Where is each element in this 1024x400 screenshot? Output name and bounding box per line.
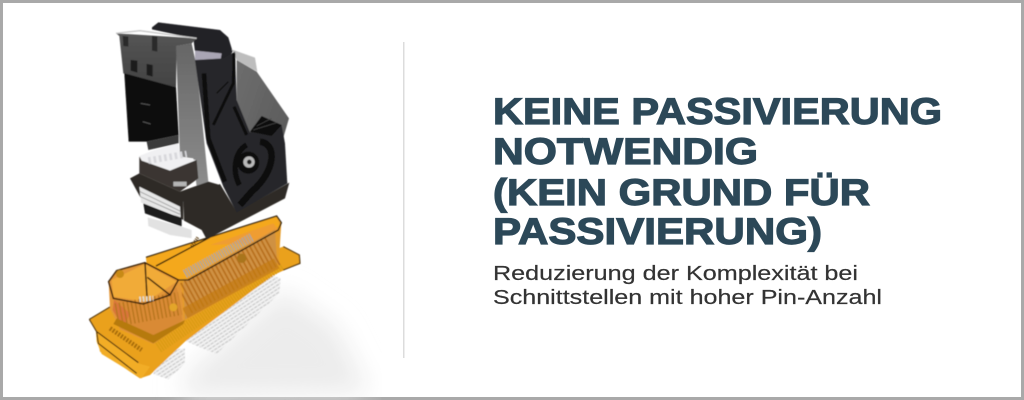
- floor shadow: [183, 290, 370, 397]
- cover recess stripes: [204, 73, 225, 182]
- yellow latch details: [116, 270, 124, 278]
- teeth strip: [157, 263, 280, 347]
- left wall: [116, 33, 197, 88]
- heading: (KEIN GRUND FÜR: [493, 171, 870, 213]
- black upper hood: [116, 22, 289, 239]
- white stacked module: [139, 187, 181, 217]
- white contact pins: [183, 275, 281, 354]
- heading: NOTWENDIG: [493, 130, 758, 172]
- bottom wedge: [183, 183, 289, 239]
- heading: KEINE PASSIVIERUNG: [493, 90, 942, 132]
- flange: [89, 247, 300, 378]
- pivot bolt: [237, 152, 259, 174]
- base block: [139, 157, 198, 192]
- subheading: Schnittstellen mit hoher Pin-Anzahl: [493, 287, 882, 309]
- white contact grid: [139, 143, 196, 171]
- heading: [493, 90, 942, 252]
- curved arc: [240, 142, 272, 205]
- connector illustration: [89, 22, 370, 397]
- dark housing outline: [146, 216, 281, 280]
- side pillar: [176, 43, 208, 187]
- rear light edge: [232, 49, 257, 72]
- subheading: [493, 263, 882, 309]
- subheading: Reduzierung der Komplexität bei: [493, 263, 858, 285]
- front cover: [195, 52, 287, 213]
- internal white pins in chamber: [139, 290, 153, 307]
- rear arch: [152, 22, 233, 65]
- main housing: [146, 216, 281, 322]
- grey internal pins: [185, 237, 252, 274]
- vertical divider: [403, 42, 404, 358]
- rotary lever fin: [250, 116, 282, 136]
- orange lower connector: [89, 216, 300, 379]
- small front chamber: [109, 263, 184, 344]
- right side panel: [237, 60, 289, 212]
- dark cavity: [124, 73, 179, 142]
- heading: PASSIVIERUNG): [493, 210, 822, 252]
